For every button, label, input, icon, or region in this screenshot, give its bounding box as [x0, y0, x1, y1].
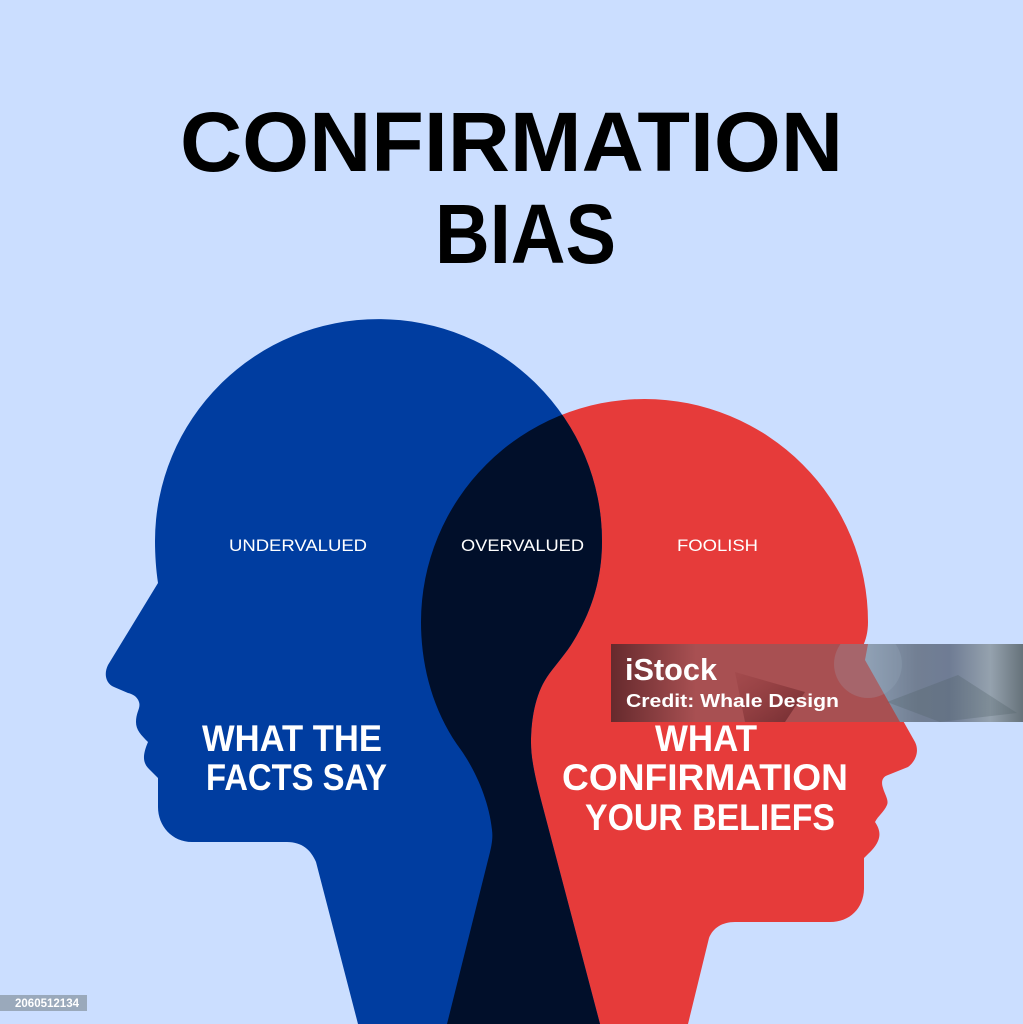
blue head silhouette — [106, 319, 602, 1024]
watermark logo: iStock — [625, 652, 718, 687]
iStock watermark band — [611, 644, 1023, 722]
watermark right portion — [860, 644, 1023, 722]
image id tag — [0, 995, 87, 1011]
title line 1: CONFIRMATION — [180, 95, 843, 189]
red head silhouette — [421, 399, 917, 1024]
label: overvalued: OVERVALUED — [461, 536, 584, 555]
watermark dark centre patch — [738, 676, 805, 722]
watermark dark left patch — [611, 644, 686, 722]
text block: what confirmation your beliefs — [562, 718, 848, 838]
label: foolish: FOOLISH — [677, 536, 758, 555]
line: your beliefs: YOUR BELIEFS — [585, 797, 835, 838]
line: confirmation: CONFIRMATION — [562, 757, 848, 798]
line: facts say: FACTS SAY — [206, 757, 387, 798]
title line 2: BIAS — [435, 187, 616, 281]
watermark left portion over head — [611, 644, 900, 722]
title — [180, 95, 843, 281]
id background — [0, 995, 87, 1011]
line: what: WHAT — [655, 718, 757, 759]
watermark right circle — [834, 644, 902, 698]
watermark credit: Credit: Whale Design — [626, 690, 839, 711]
label: undervalued: UNDERVALUED — [229, 536, 367, 555]
id number: 2060512134 — [15, 996, 79, 1010]
watermark right polygon — [887, 675, 1017, 722]
text block: what the facts say — [202, 718, 387, 798]
overlap region of both heads — [421, 414, 602, 1024]
line: what the: WHAT THE — [202, 718, 382, 759]
